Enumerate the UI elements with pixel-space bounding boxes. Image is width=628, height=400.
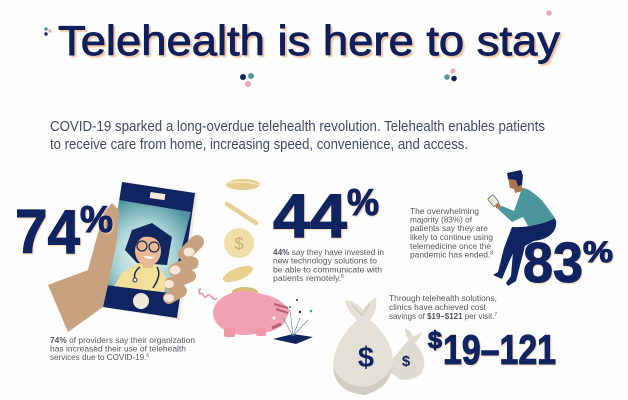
- text: 44% caption: new technology solutions to: [273, 256, 377, 266]
- decorative dots: under title right: [444, 68, 457, 81]
- panel: 83 percent patients: [410, 170, 613, 295]
- text: 83% caption: patients say they are: [410, 223, 488, 233]
- intro text: [50, 119, 545, 153]
- stat: 74%: 74: [15, 198, 80, 267]
- intro text: to receive care from home, increasing speed, convenience, and access.: [50, 137, 468, 153]
- text: 83% caption: likely to continue using: [410, 232, 493, 242]
- stat: 44%: %: [347, 182, 379, 223]
- text: 44% caption: [273, 247, 384, 283]
- illustration: money bags: $: [402, 353, 411, 370]
- panel: 44 percent technology: [199, 179, 384, 344]
- text: savings caption: Through telehealth solutions,: [389, 293, 497, 303]
- illustration: piggy bank: [199, 289, 290, 337]
- panel: 74 percent providers: [15, 182, 198, 362]
- illustration: coins: $: [234, 234, 244, 253]
- stat: 83%: %: [583, 236, 613, 269]
- small bag: [385, 328, 424, 380]
- text: 44% caption: be able to communicate with: [273, 264, 382, 274]
- text: savings caption: clinics have achieved cost: [389, 302, 487, 312]
- text: 74% caption: 6: [146, 353, 149, 359]
- illustration: phone in hand: [48, 182, 198, 332]
- illustration: money bags: $: [358, 342, 374, 374]
- front leg: [493, 218, 556, 279]
- decorative dot: top right: [546, 10, 552, 16]
- panel: cost savings: [333, 293, 556, 395]
- text: 44% caption: 5: [341, 274, 344, 280]
- text: 74% caption: 74% of providers say their organization: [50, 335, 195, 345]
- decorative dots: top left: [44, 27, 52, 36]
- stat: 83%: 83: [523, 231, 583, 295]
- doctor: [112, 223, 172, 294]
- text: 83% caption: The overwhelming: [410, 206, 479, 216]
- decorative dots: under title left: [240, 73, 254, 87]
- text: 83% caption: [410, 206, 493, 260]
- stat: 44%: [273, 182, 379, 251]
- stat: $19-121: $: [428, 327, 443, 354]
- text: 74% caption: has increased their use of telehealth: [50, 344, 186, 354]
- title: Telehealth is here to stay: [58, 17, 560, 64]
- illustration: portal sparks: [273, 299, 313, 344]
- text: 44% caption: 44% say they have invested in: [273, 247, 384, 257]
- stat: 74%: %: [80, 199, 113, 240]
- text: 83% caption: pandemic has ended.: [410, 250, 492, 260]
- intro text: COVID-19 sparked a long-overdue telehealth revolution. Telehealth enables patients: [50, 119, 545, 135]
- text: savings caption: 7: [494, 312, 497, 318]
- text: 74% caption: services due to COVID-19.: [50, 352, 152, 362]
- text: 83% caption: telemedicine once the: [410, 241, 491, 251]
- text: savings caption: savings of $19–$121 per visit.: [389, 311, 497, 321]
- text: 74% caption: [50, 335, 195, 362]
- text: 44% caption: patients remotely.: [273, 273, 340, 283]
- text: 83% caption: majority (83%) of: [410, 214, 473, 224]
- illustration: coins: [221, 179, 260, 297]
- stat: 44%: 44: [273, 182, 348, 251]
- stat: $19-121: 19–121: [443, 326, 556, 373]
- large bag: [333, 297, 393, 395]
- illustration: seated man with phone: [488, 170, 556, 286]
- text: 83% caption: 8: [490, 250, 493, 256]
- illustration: money bags: [333, 297, 424, 395]
- text: savings caption: [389, 293, 497, 321]
- shirt and arm: [497, 188, 555, 226]
- back leg: [506, 220, 556, 286]
